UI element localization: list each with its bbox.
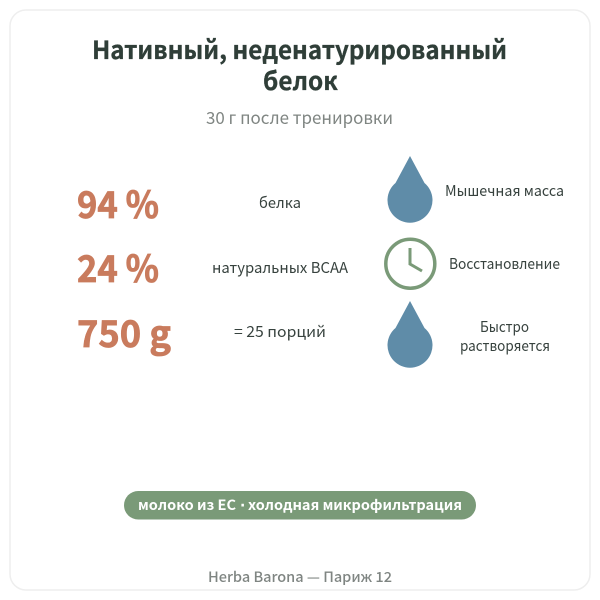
subtitle: 30 г после тренировки xyxy=(206,104,393,129)
stat: 750 g = 25 порций: = 25 порций xyxy=(234,321,326,342)
pill badge: молоко из ЕС xyxy=(138,495,236,515)
stat: 24 % натуральных BCAA: 24 % xyxy=(77,239,159,293)
footer: Herba Barona — Париж 12 xyxy=(208,567,392,587)
title: белок xyxy=(263,62,338,98)
label: dissolves fast xyxy=(460,316,550,356)
stat: 94 % белка: белка xyxy=(259,192,301,213)
stat: 94 % белка: 94 % xyxy=(77,175,159,229)
label: recovery: Восстановление xyxy=(449,253,560,274)
stat: 750 g = 25 порций: 750 g xyxy=(77,304,171,358)
stat: 94 % белка xyxy=(77,175,301,229)
icon: water drop, dissolves fast xyxy=(388,301,432,368)
title xyxy=(92,31,507,98)
icon: water drop, muscle mass xyxy=(388,156,432,223)
label: muscle mass: Мышечная масса xyxy=(445,180,564,201)
pill badge: · xyxy=(240,498,245,514)
pill badge: холодная микрофильтрация xyxy=(248,495,462,515)
label: dissolves fast: растворяется xyxy=(460,335,550,356)
label: dissolves fast: Быстро xyxy=(480,316,529,337)
stat: 750 g = 25 порций xyxy=(77,304,326,358)
title: Нативный, неденатурированный xyxy=(92,31,507,67)
stat: 24 % натуральных BCAA xyxy=(77,239,349,293)
icon: clock xyxy=(386,239,435,288)
pill badge xyxy=(124,491,476,520)
stat: 24 % натуральных BCAA: натуральных BCAA xyxy=(212,257,349,278)
